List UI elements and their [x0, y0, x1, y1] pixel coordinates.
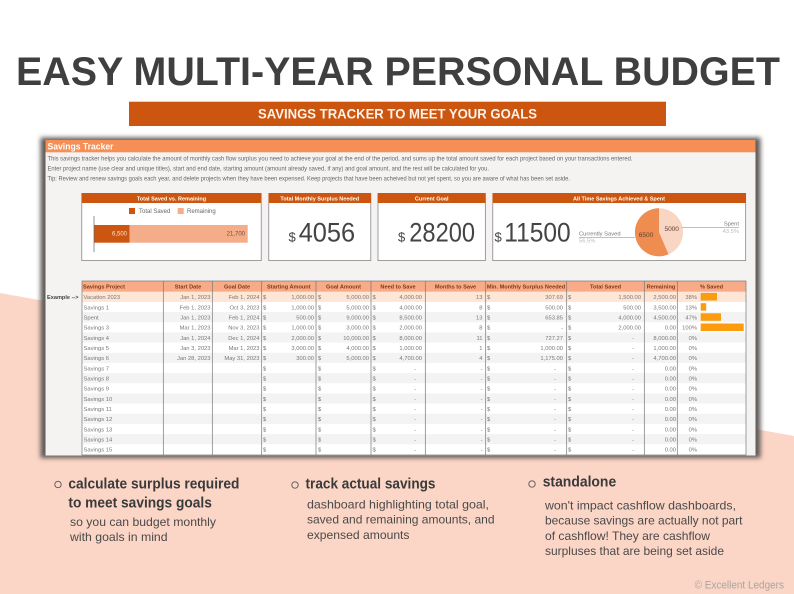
table rows: 4,500.00 — [653, 315, 676, 321]
table rows: Savings 10 — [84, 397, 112, 403]
table rows: $ — [318, 427, 322, 433]
feature: standalone: because savings are actually not part — [545, 514, 743, 528]
table rows: $ — [372, 366, 376, 372]
table rows: 1,000.00 — [653, 346, 676, 352]
table rows: 0% — [689, 336, 697, 342]
table rows: Savings 1 — [84, 305, 109, 311]
table rows: $ — [568, 326, 572, 332]
table rows: - — [632, 376, 634, 382]
stacked bar chart: 6,500 — [112, 232, 128, 238]
table grid lines — [82, 281, 746, 455]
pie label: spent: Spent — [724, 222, 739, 228]
table rows: Savings 9 — [84, 387, 109, 393]
table rows: 4,000.00 — [346, 346, 369, 352]
card: total monthly surplus needed: 4056 — [299, 218, 355, 248]
table rows: Jan 28, 2023 — [177, 356, 210, 362]
table header: Months to Save — [435, 284, 476, 290]
table rows: $ — [487, 397, 491, 403]
table rows: $ — [568, 438, 572, 444]
table rows: 0% — [689, 376, 697, 382]
table rows: $ — [263, 346, 267, 352]
table rows: $ — [372, 305, 376, 311]
table rows: 2,500.00 — [653, 295, 676, 301]
card: current goal: 28200 — [409, 218, 475, 248]
table rows: Savings 4 — [84, 336, 110, 342]
pie chart: 5000 — [664, 226, 679, 233]
table rows: 2,000.00 — [618, 326, 641, 332]
table rows: 1,000.00 — [399, 346, 422, 352]
table rows: $ — [263, 448, 267, 454]
table rows: $ — [568, 427, 572, 433]
table rows: $ — [487, 305, 491, 311]
table rows: 0.00 — [665, 427, 676, 433]
table rows: $ — [372, 427, 376, 433]
table rows: 0.00 — [665, 326, 676, 332]
table rows: - — [632, 397, 634, 403]
table rows: $ — [318, 346, 322, 352]
table rows: Savings 15 — [84, 448, 112, 454]
table rows: - — [554, 366, 556, 372]
table rows: Oct 3, 2023 — [230, 305, 260, 311]
table rows: Feb 1, 2024 — [229, 295, 260, 301]
table rows: $ — [372, 407, 376, 413]
table rows: - — [632, 346, 634, 352]
table rows: - — [554, 376, 556, 382]
table rows: $ — [568, 448, 572, 454]
table rows: 0.00 — [665, 448, 676, 454]
table rows: $ — [487, 366, 491, 372]
table rows: 3,000.00 — [346, 326, 369, 332]
table rows: - — [554, 407, 556, 413]
table rows: $ — [487, 336, 491, 342]
table rows: 4,000.00 — [618, 315, 641, 321]
table rows: - — [632, 427, 634, 433]
table rows: $ — [372, 356, 376, 362]
table rows: $ — [568, 366, 572, 372]
table header: % Saved — [700, 284, 724, 290]
table rows: $ — [372, 346, 376, 352]
table rows: 0.00 — [665, 417, 676, 423]
feature: standalone: surpluses that are being set aside — [545, 544, 724, 558]
card: all time savings achieved and spent: 11500 — [504, 218, 571, 248]
table rows: Feb 1, 2024 — [229, 315, 260, 321]
panel header — [46, 140, 756, 152]
table rows: May 31, 2023 — [224, 356, 260, 362]
stacked bar chart: 21,700 — [227, 232, 246, 238]
table header: Min. Monthly Surplus Needed — [487, 284, 566, 290]
pie label: currently saved: 56.5% — [579, 238, 595, 244]
table rows: Jan 3, 2023 — [180, 346, 210, 352]
table rows: $ — [318, 407, 322, 413]
table rows: $ — [568, 346, 572, 352]
table rows: - — [414, 438, 416, 444]
table rows: - — [632, 438, 634, 444]
table rows: 5,000.00 — [346, 356, 369, 362]
table rows: 13 — [476, 295, 482, 301]
table rows: $ — [568, 295, 572, 301]
table rows: $ — [263, 315, 267, 321]
table rows: 500.00 — [296, 315, 314, 321]
table rows: $ — [318, 376, 322, 382]
table rows: 2,000.00 — [399, 326, 422, 332]
legend: Remaining — [187, 209, 216, 215]
table rows: - — [414, 407, 416, 413]
feature: track actual savings: dashboard highlighting total goal, — [307, 497, 489, 511]
table rows: - — [481, 397, 483, 403]
table rows: $ — [372, 326, 376, 332]
table rows: - — [632, 356, 634, 362]
table rows: 0% — [689, 346, 697, 352]
table rows: - — [554, 387, 556, 393]
panel shadow — [40, 138, 760, 458]
table rows: 0% — [689, 356, 697, 362]
table rows: $ — [318, 305, 322, 311]
table header: Starting Amount — [267, 284, 311, 290]
table rows: - — [554, 427, 556, 433]
table rows: - — [554, 417, 556, 423]
table rows: $ — [487, 356, 491, 362]
table rows: 13 — [476, 315, 482, 321]
table rows: - — [414, 397, 416, 403]
legend: Total Saved — [139, 209, 170, 215]
table rows: $ — [318, 448, 322, 454]
table rows: Jan 1, 2023 — [180, 315, 210, 321]
feature: calculate surplus: calculate surplus required — [68, 476, 239, 492]
table rows: 0.00 — [665, 407, 676, 413]
feature: standalone: won't impact cashflow dashboards, — [544, 498, 736, 512]
card: total saved vs remaining — [82, 193, 262, 261]
table header — [82, 281, 746, 292]
table rows: 4,700.00 — [399, 356, 422, 362]
table rows: Jan 1, 2024 — [180, 336, 211, 342]
table rows: 0.00 — [665, 366, 676, 372]
table rows: $ — [318, 366, 322, 372]
table rows: 100% — [682, 326, 697, 332]
table rows: Savings 6 — [84, 356, 109, 362]
table rows: 1 — [479, 346, 482, 352]
table rows: $ — [263, 376, 267, 382]
table rows: - — [554, 397, 556, 403]
table rows: $ — [372, 376, 376, 382]
table rows: 0% — [689, 397, 697, 403]
table rows: $ — [487, 295, 491, 301]
table rows: - — [632, 336, 634, 342]
table header: Goal Amount — [326, 284, 361, 290]
table rows: $ — [372, 336, 376, 342]
savings table — [82, 281, 746, 455]
table rows: Savings 5 — [84, 346, 109, 352]
table rows: 47% — [685, 315, 697, 321]
feature: calculate surplus: to meet savings goals — [68, 495, 212, 511]
table rows: 2,000.00 — [291, 336, 314, 342]
pie label: currently saved — [579, 231, 635, 244]
table rows: $ — [318, 417, 322, 423]
table rows: - — [481, 438, 483, 444]
table header: Start Date — [175, 284, 201, 290]
table rows: 0% — [689, 417, 697, 423]
table rows: 1,000.00 — [291, 326, 314, 332]
table rows: $ — [372, 387, 376, 393]
feature: track actual savings: saved and remaining amounts, and — [307, 513, 494, 527]
pie label: spent — [682, 222, 739, 235]
card: total saved vs remaining: Total Saved vs. Remaining — [137, 197, 206, 203]
card: all time savings achieved and spent: $ — [494, 230, 502, 244]
table rows: - — [481, 366, 483, 372]
table header: Total Saved — [590, 284, 622, 290]
pie chart: 6500 — [639, 232, 654, 239]
table rows: 4,700.00 — [653, 356, 676, 362]
table rows: 1,500.00 — [618, 295, 641, 301]
table rows: 1,175.00 — [540, 356, 563, 362]
card: current goal — [378, 193, 486, 261]
background: peach diagonal shape — [0, 293, 794, 594]
table rows: 0% — [689, 407, 697, 413]
table rows: 500.00 — [545, 305, 563, 311]
table rows: - — [481, 448, 483, 454]
table rows: $ — [568, 397, 572, 403]
table rows: - — [632, 448, 634, 454]
table rows: 727.27 — [545, 336, 563, 342]
table rows: $ — [318, 315, 322, 321]
table rows: 8,000.00 — [653, 336, 676, 342]
table rows: 1,000.00 — [540, 346, 563, 352]
table rows: - — [561, 326, 563, 332]
table rows: 9,000.00 — [346, 315, 369, 321]
table rows: 1,000.00 — [291, 295, 314, 301]
table rows: Spent — [84, 315, 99, 321]
stacked bar chart — [94, 216, 248, 252]
table rows: $ — [263, 427, 267, 433]
table rows: $ — [372, 295, 376, 301]
table rows: $ — [568, 407, 572, 413]
table rows: Vacation 2023 — [84, 295, 120, 301]
table rows: - — [632, 366, 634, 372]
table rows: $ — [263, 336, 267, 342]
feature: track actual savings: track actual savings — [306, 477, 436, 493]
title: EASY MULTI-YEAR PERSONAL BUDGET — [16, 50, 780, 94]
table rows: 653.85 — [545, 315, 563, 321]
table rows: 0% — [689, 387, 697, 393]
table rows: 0.00 — [665, 397, 676, 403]
table rows: - — [632, 387, 634, 393]
table rows: 307.69 — [545, 295, 563, 301]
table rows: Dec 1, 2024 — [228, 336, 260, 342]
table rows: $ — [263, 295, 267, 301]
card: total monthly surplus needed: $ — [288, 230, 296, 244]
feature: track actual savings: expensed amounts — [307, 528, 410, 542]
table rows: 8 — [479, 326, 482, 332]
table header: Goal Date — [224, 284, 250, 290]
feature: standalone: standalone — [543, 475, 616, 491]
table rows: 0% — [689, 366, 697, 372]
table rows: Savings 3 — [84, 326, 109, 332]
table rows: Savings 11 — [84, 407, 112, 413]
table rows: 4,000.00 — [399, 305, 422, 311]
table rows: $ — [487, 387, 491, 393]
table rows: $ — [487, 448, 491, 454]
feature: standalone — [529, 475, 743, 558]
table rows: 4 — [479, 356, 483, 362]
feature: standalone: of cashflow! They are cashflow — [545, 529, 710, 543]
table rows: $ — [487, 346, 491, 352]
panel header: Savings Tracker — [48, 142, 114, 152]
table rows: 3,500.00 — [653, 305, 676, 311]
example label: Example --> — [47, 295, 79, 301]
feature: track actual savings — [292, 477, 494, 542]
table rows: $ — [568, 305, 572, 311]
table rows: Feb 1, 2023 — [180, 305, 210, 311]
table rows: $ — [318, 336, 322, 342]
card: total monthly surplus needed: Total Monthly Surplus Needed — [280, 197, 359, 203]
table rows: - — [414, 366, 416, 372]
table rows: $ — [487, 376, 491, 382]
table rows: - — [481, 427, 483, 433]
table rows: 5,000.00 — [346, 305, 369, 311]
table rows — [84, 295, 697, 454]
table rows: - — [414, 376, 416, 382]
table rows: $ — [487, 438, 491, 444]
table rows: $ — [263, 397, 267, 403]
table rows: $ — [487, 315, 491, 321]
table rows: $ — [372, 438, 376, 444]
table header: Need to Save — [380, 284, 416, 290]
table rows: $ — [568, 417, 572, 423]
table rows: 0.00 — [665, 438, 676, 444]
feature: calculate surplus — [55, 476, 239, 544]
table rows: - — [414, 427, 416, 433]
table rows: 5,000.00 — [346, 295, 369, 301]
table rows: - — [481, 407, 483, 413]
table rows: $ — [263, 387, 267, 393]
table rows: $ — [318, 326, 322, 332]
table rows: 300.00 — [296, 356, 314, 362]
table rows: $ — [487, 417, 491, 423]
table rows: Nov 3, 2023 — [228, 326, 260, 332]
table rows: 8 — [479, 305, 482, 311]
table rows: $ — [568, 356, 572, 362]
subtitle banner — [129, 102, 666, 126]
table rows: $ — [568, 336, 572, 342]
table rows: $ — [372, 397, 376, 403]
table rows: Mar 1, 2023 — [229, 346, 260, 352]
table rows: 0% — [689, 438, 697, 444]
table rows: $ — [318, 295, 322, 301]
description text: Tip: Review and renew savings goals each year, and delete projects when they have been expensed. Keep projects that have been acheived but not yet spent, so you are aware of what has been set aside. — [48, 176, 570, 182]
table rows: $ — [263, 407, 267, 413]
percent saved data bars — [701, 293, 744, 331]
table rows: $ — [263, 438, 267, 444]
table rows: $ — [263, 326, 267, 332]
table rows: 13% — [685, 305, 697, 311]
pie label: spent: 43.5% — [723, 229, 739, 235]
table rows: 8,500.00 — [399, 315, 422, 321]
table rows: Savings 13 — [84, 427, 112, 433]
card: current goal: Current Goal — [415, 197, 449, 203]
table rows: - — [414, 448, 416, 454]
table rows: $ — [263, 366, 267, 372]
table rows: 10,000.00 — [343, 336, 369, 342]
table rows: Savings 12 — [84, 417, 112, 423]
card: all time savings achieved and spent — [492, 193, 746, 261]
table rows: $ — [318, 438, 322, 444]
table rows: 0% — [689, 427, 697, 433]
table rows: 0.00 — [665, 376, 676, 382]
table rows: $ — [487, 427, 491, 433]
table rows: - — [554, 438, 556, 444]
table rows: $ — [568, 376, 572, 382]
table rows: $ — [372, 448, 376, 454]
description text: This savings tracker helps you calculate the amount of monthly cash flow surplus you need to achieve your goal at the end of the period, and sums up the total amount saved for each project based on your transactions entered. — [48, 156, 633, 162]
table rows: - — [632, 407, 634, 413]
table rows: Savings 14 — [84, 438, 113, 444]
table rows: - — [481, 417, 483, 423]
table rows: $ — [263, 305, 267, 311]
table rows: $ — [487, 407, 491, 413]
table rows: $ — [318, 387, 322, 393]
pie label: currently saved: Currently Saved — [579, 231, 621, 237]
table header: Savings Project — [83, 284, 125, 290]
table rows: Mar 1, 2023 — [180, 326, 210, 332]
table rows: 1,000.00 — [291, 305, 314, 311]
copyright: © Excellent Ledgers — [695, 579, 784, 591]
table rows: $ — [263, 417, 267, 423]
table rows: - — [632, 417, 634, 423]
table rows: 4,000.00 — [399, 295, 422, 301]
table rows: - — [414, 387, 416, 393]
panel: savings tracker — [46, 140, 756, 456]
table rows: Savings 7 — [84, 366, 109, 372]
table rows: Savings 8 — [84, 376, 109, 382]
card: all time savings achieved and spent: All Time Savings Achieved & Spent — [573, 197, 665, 203]
table rows: $ — [568, 315, 572, 321]
table rows: $ — [372, 315, 376, 321]
table rows: 3,000.00 — [291, 346, 314, 352]
table rows: $ — [372, 417, 376, 423]
subtitle banner: SAVINGS TRACKER TO MEET YOUR GOALS — [258, 106, 537, 122]
feature: calculate surplus: with goals in mind — [69, 530, 168, 544]
table rows: $ — [487, 326, 491, 332]
table rows: 0.00 — [665, 387, 676, 393]
table rows: 500.00 — [623, 305, 641, 311]
table header: Remaining — [647, 284, 676, 290]
table rows: $ — [263, 356, 267, 362]
table rows: - — [481, 387, 483, 393]
legend — [129, 208, 216, 215]
description text: Enter project name (use clear and unique titles), start and end date, starting amount (amount already saved, if any) and goal amount, and the rest will be calculated for you. — [48, 166, 489, 172]
table rows: $ — [318, 397, 322, 403]
table rows: $ — [318, 356, 322, 362]
table rows: - — [414, 417, 416, 423]
table rows: 8,000.00 — [399, 336, 422, 342]
pie chart — [635, 208, 683, 256]
table rows: - — [554, 448, 556, 454]
card: total monthly surplus needed — [268, 193, 371, 261]
description text — [48, 156, 633, 182]
table rows: 38% — [685, 295, 697, 301]
table rows: Jan 1, 2023 — [180, 295, 210, 301]
card: current goal: $ — [398, 230, 406, 244]
table rows: - — [481, 376, 483, 382]
table rows: 11 — [476, 336, 482, 342]
table rows: 0% — [689, 448, 697, 454]
table rows: $ — [568, 387, 572, 393]
feature: calculate surplus: so you can budget monthly — [70, 515, 216, 529]
